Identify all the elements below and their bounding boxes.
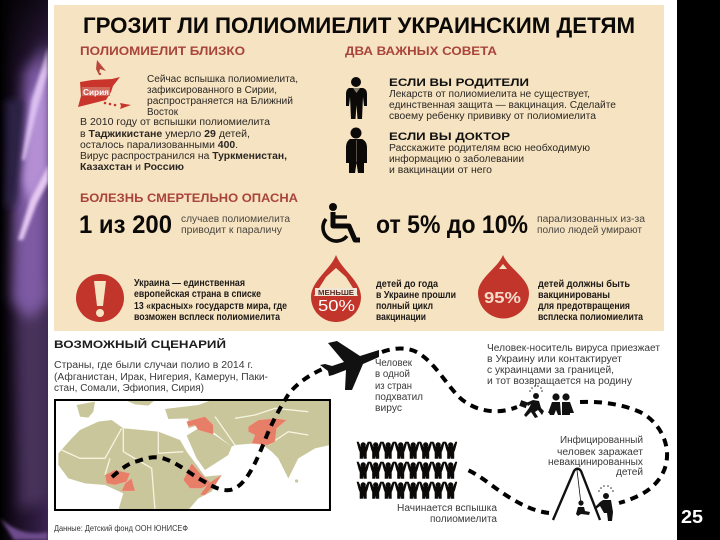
icon: drop less than 50% [311,255,361,322]
stat: from 5% to 10%: от 5% до 10% [376,211,528,239]
text block: Ukraine among risk countries: возможен всплеск полиомиелита [134,311,280,323]
text block: outbreak description: распространяется на Ближний [147,96,293,107]
text block: carrier comes to Ukraine: в Украину или контактирует [487,354,622,365]
icon: drop 95%: 95% [484,290,521,307]
panel: purple side strip [0,0,48,540]
text block: 5-10% caption: полио людей умирают [537,225,642,236]
page number: 25 [681,507,703,527]
arrow: route from couple to infected adult [580,402,667,503]
text block: carrier comes to Ukraine: с украинцами за границей, [487,365,614,376]
icon: parent [346,77,367,119]
text block: outbreak description: В 2010 году от вспышки полиомиелита [80,117,270,128]
text block: infected person infects children: Инфицированный [560,434,643,446]
text block: countries list: (Афганистан, Ирак, Нигерия, Камерун, Паки- [54,371,268,383]
text block: outbreak description: зафиксированного в Сирии, [147,84,277,96]
icon: plane [320,341,379,390]
text block: children must be vaccinated: всплеска полиомиелита [538,311,643,323]
text block: person caught the virus: Человек [375,358,413,369]
arrow: route from swing to crowd [468,470,549,513]
text block: person caught the virus: подхватил [375,392,423,403]
text block: under-one children vaccinated: детей до года [376,278,438,290]
heading: two important tips: ДВА ВАЖНЫХ СОВЕТА [345,46,497,58]
text block: outbreak description: Восток [147,107,179,118]
text block: Ukraine among risk countries: 13 «красных» государств мира, где [134,300,287,312]
source: Данные: Детский фонд ООН ЮНИСЕФ [54,523,188,533]
text block: 5-10% caption: парализованных из-за [537,214,645,225]
text block: carrier comes to Ukraine [487,343,660,387]
icon: Syria map with arrows [78,60,131,109]
text block: Ukraine among risk countries: Украина — единственная [134,277,245,289]
text block: outbreak description: осталось парализованными 400. [80,140,238,151]
text block: outbreak description: Казахстан и Россию [80,162,184,173]
text block: if you are a doctor: Расскажите родителям всю необходимую [389,142,591,154]
text block: if you are a parent: Лекарств от полиомиелита не существует, [389,89,590,100]
icon: couple [548,393,574,415]
title: ГРОЗИТ ЛИ ПОЛИОМИЕЛИТ УКРАИНСКИМ ДЕТЯМ [83,13,635,38]
text block: outbreak begins: Начинается вспышка [397,503,497,514]
text block: if you are a doctor: и вакцинации от него [389,165,492,176]
arrow: route from Nigeria through Somalia and Pakistan to the plane [112,367,327,490]
icon: drop less than 50%: 50% [318,298,355,315]
text block: if you are a doctor: ЕСЛИ ВЫ ДОКТОР [389,131,510,143]
text block: person caught the virus: в одной [375,369,410,380]
text block: children must be vaccinated: детей должны быть [538,278,630,290]
text block: countries list: Страны, где были случаи полио в 2014 г. [54,359,253,371]
icon: exclamation circle [76,274,124,322]
text block: infected person infects children: невакцинированных [548,457,643,468]
text block: 1 in 200 caption: случаев полиомиелита [181,214,290,225]
text block: outbreak description: Сейчас вспышка полиомиелита, [147,74,298,85]
icon: drop 95% [478,255,529,318]
icon: wheelchair [323,203,360,241]
text block: Ukraine among risk countries [134,277,287,323]
icon: drop less than 50%: МЕНЬШЕ [318,288,354,297]
text block: carrier comes to Ukraine: Человек-носитель вируса приезжает [487,343,660,354]
icon: Syria map with arrows: Сирия [83,87,109,97]
arrow: route from plane to traveller [382,348,517,411]
text block: under-one children vaccinated: в Украине прошли [376,289,456,301]
text block: person caught the virus: из стран [375,381,412,392]
text block: under-one children vaccinated [376,278,456,323]
text block: countries list [54,359,268,394]
text block: outbreak description: Вирус распространился на Туркменистан, [80,151,287,162]
text block: if you are a doctor [389,131,591,176]
text block: 1 in 200 caption: приводит к параличу [181,225,282,236]
text block: children must be vaccinated: для предотвращения [538,300,630,312]
text block: infected person infects children [548,434,643,478]
heading: possible scenario: ВОЗМОЖНЫЙ СЦЕНАРИЙ [54,338,226,351]
text block: if you are a parent: своему ребенку прививку от полиомиелита [389,110,596,122]
heading: polio is near: ПОЛИОМИЕЛИТ БЛИЗКО [80,46,245,58]
icon: running carrier with virus [519,385,544,418]
text block: infected person infects children: детей [616,467,643,478]
text block: person caught the virus [375,358,423,414]
text block: outbreak description [80,74,298,173]
text block: countries list: стан, Сомали, Эфиопия, Сирия) [54,382,204,394]
text block: under-one children vaccinated: вакцинации [376,311,426,323]
stat: 1 in 200: 1 из 200 [79,211,172,239]
text block: if you are a doctor: информацию о заболевании [389,153,524,165]
text block: carrier comes to Ukraine: и тот возвращается на родину [487,376,632,387]
text block: if you are a parent [389,77,616,122]
text block: if you are a parent: единственная защита — вакцинация. Сделайте [389,100,616,111]
heading: deadly disease: БОЛЕЗНЬ СМЕРТЕЛЬНО ОПАСНА [80,193,298,205]
text block: under-one children vaccinated: полный цикл [376,300,433,312]
text block: infected person infects children: человек заражает [557,447,643,458]
text block: outbreak description: в Таджикистане умерло 29 детей, [80,129,250,140]
text block: children must be vaccinated [538,278,643,323]
text block: outbreak begins [397,503,497,525]
panel: beige upper infographic [54,5,664,331]
text block: children must be vaccinated: вакцинированы [538,289,610,301]
map: polio countries [55,400,330,510]
icon: infected adult with virus [595,485,614,521]
text block: outbreak begins: полиомиелита [430,514,497,525]
text block: person caught the virus: вирус [375,403,402,414]
text block: 1 in 200 caption [181,214,290,236]
icon: crowd of children [357,442,457,498]
text block: 5-10% caption [537,214,645,236]
icon: doctor [346,128,367,173]
text block: if you are a parent: ЕСЛИ ВЫ РОДИТЕЛИ [389,77,529,89]
icon: swing with child [553,469,600,520]
text block: Ukraine among risk countries: европейская страна в списке [134,288,261,300]
